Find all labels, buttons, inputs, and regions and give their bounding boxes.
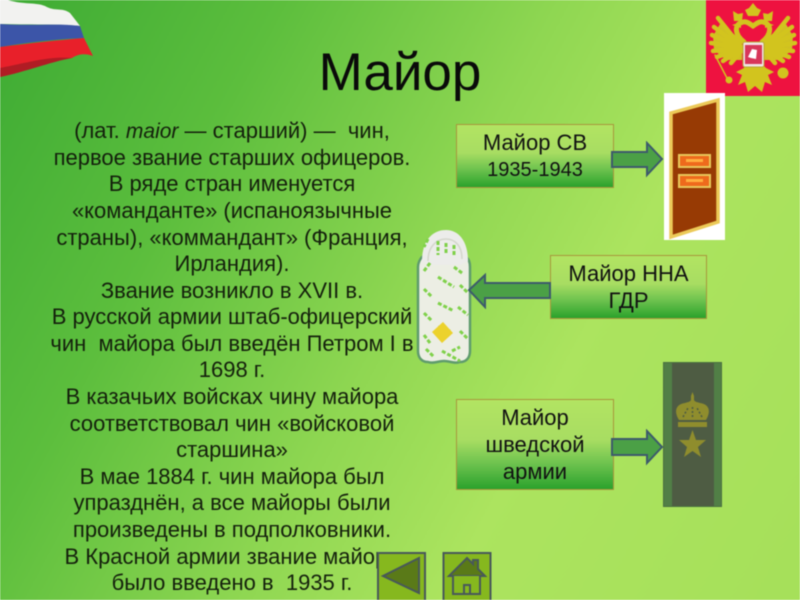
- label box: Майор ННА ГДР: [550, 255, 707, 319]
- text block: major rank history: упразднён, а все майоры были: [73, 490, 391, 515]
- text block: major rank history: 1698 г.: [199, 357, 265, 382]
- text block: major rank history: первое звание старших офицеров.: [54, 145, 410, 170]
- arrow: to shoulder board: [467, 272, 552, 310]
- text block: major rank history: Ирландия).: [174, 251, 290, 276]
- text block: major rank history: В мае 1884 г. чин майора был: [80, 464, 384, 489]
- text block: major rank history: старшина»: [176, 437, 288, 462]
- button: home: [442, 551, 492, 600]
- text block: major rank history: В ряде стран именуется: [109, 171, 355, 196]
- icon: russian flag: [0, 0, 94, 78]
- arrow: to collar tab: [610, 140, 664, 178]
- button: back: [376, 551, 427, 600]
- text block: major rank history: В казачьих войсках чину майора: [66, 384, 398, 409]
- label box: Майор ННА ГДР: Майор ННА: [568, 261, 689, 286]
- text block: major rank history: (лат. maior — старший) — чин,: [74, 118, 390, 143]
- text block: major rank history: произведены в подполковники.: [73, 517, 391, 542]
- text block: major rank history: «команданте» (испаноязычные: [72, 198, 392, 223]
- text block: major rank history: В русской армии штаб-офицерский: [52, 304, 412, 329]
- label box: Майор шведской армии: шведской: [485, 432, 585, 457]
- icon: swedish major insignia: [662, 361, 723, 508]
- icon: soviet major collar tab: [663, 92, 726, 241]
- text block: major rank history: чин майора был введён Петром I в: [50, 331, 414, 356]
- label box: Майор СВ: Майор СВ: [483, 130, 587, 155]
- title: Майор: [319, 43, 481, 102]
- arrow: to swedish insignia: [610, 428, 664, 466]
- text block: major rank history: соответствовал чин «войсковой: [70, 411, 394, 436]
- text block: major rank history: Звание возникло в XVII в.: [101, 278, 363, 303]
- icon: gdr major shoulder board: [416, 229, 472, 364]
- text block: major rank history: [50, 118, 414, 596]
- label box: Майор шведской армии: армии: [503, 459, 567, 484]
- label box: Майор СВ: 1935-1943: [487, 159, 583, 181]
- text block: major rank history: страны), «коммандант» (Франция,: [56, 225, 408, 250]
- text block: major rank history: было введено в 1935 г.: [112, 570, 352, 595]
- label box: Майор СВ: [456, 124, 614, 188]
- label box: Майор шведской армии: [456, 399, 614, 490]
- label box: Майор ННА ГДР: ГДР: [608, 288, 648, 313]
- icon: russian coat of arms: [705, 0, 800, 97]
- label box: Майор шведской армии: Майор: [501, 405, 569, 430]
- text block: major rank history: В Красной армии звание майора: [64, 544, 400, 569]
